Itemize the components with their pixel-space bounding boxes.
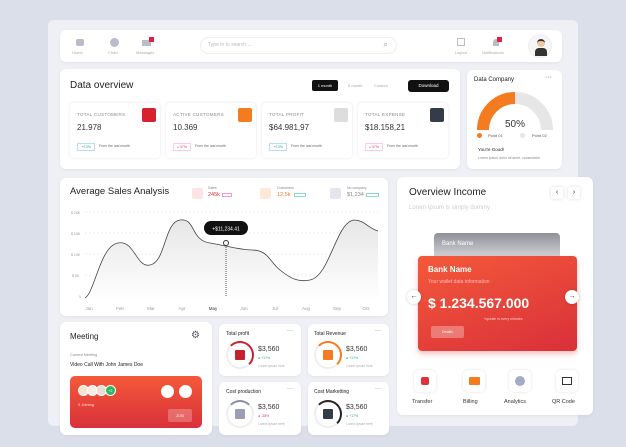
action: transfer xyxy=(412,369,437,405)
panel: overview income: → xyxy=(568,293,576,300)
panel: data overview xyxy=(60,69,460,169)
card: cost marketing: Cost Marketting xyxy=(314,389,349,395)
card: cost marketing: ● +17% xyxy=(346,414,358,418)
action: transfer: Transfer xyxy=(412,399,432,405)
line chart: Jun xyxy=(240,306,248,311)
card: total revenue: ● +17% xyxy=(346,356,358,360)
stat: active customers xyxy=(166,103,256,158)
stat: total profit: ↗13% xyxy=(273,145,283,149)
nav: messages: Messages xyxy=(136,50,154,55)
line chart xyxy=(71,211,378,311)
kpi: sales: Sales xyxy=(208,186,217,190)
top navigation bar xyxy=(60,30,562,62)
card: cost marketing: Lorem Ipsum here xyxy=(346,422,373,426)
heading: Data overview xyxy=(70,80,133,91)
call card: Join xyxy=(176,413,184,418)
nav arrows xyxy=(551,187,563,199)
period tabs xyxy=(312,80,388,91)
action: analytics: Analytics xyxy=(504,399,526,405)
call card: +2 xyxy=(108,389,112,393)
kpi: no company xyxy=(330,186,379,199)
front bank card xyxy=(418,256,577,351)
panel: overview income: Overview Income xyxy=(409,187,486,198)
panel: meeting xyxy=(60,322,212,435)
main frame xyxy=(48,20,578,426)
back card: Bank Name xyxy=(442,241,473,247)
line chart: Mar xyxy=(147,306,155,311)
stat: total customers: 21.978 xyxy=(77,123,101,132)
gauge chart xyxy=(477,92,553,130)
card: total revenue: ··· xyxy=(375,328,381,334)
search box: Type in to search ... xyxy=(208,42,252,48)
line chart: 0 xyxy=(79,295,81,299)
call card xyxy=(70,376,202,428)
panel: data company xyxy=(467,70,562,169)
line chart: Aug xyxy=(302,306,310,311)
nav: messages xyxy=(136,37,154,55)
stat: total profit xyxy=(262,103,352,158)
card: cost production: ··· xyxy=(287,386,293,392)
stat: total customers: ↗13% xyxy=(81,145,91,149)
stat: total expense: $18.158,21 xyxy=(365,123,405,132)
nav: chart: Chart xyxy=(108,50,118,55)
line chart: Oct xyxy=(362,306,370,311)
action: qr code: QR Code xyxy=(552,399,575,405)
kpi: customers: Customers xyxy=(277,186,294,190)
front bank card: *update in every minutes xyxy=(484,317,523,321)
stat: total expense: From the last month xyxy=(387,144,418,148)
stat: active customers: ACTIVE CUSTOMERS xyxy=(173,112,224,117)
panel: meeting: Current Meeting xyxy=(70,353,97,357)
stat: total expense: ↙37% xyxy=(369,145,379,149)
card: cost production: Lorem Ipsum here xyxy=(258,422,285,426)
nav: chart xyxy=(108,38,119,55)
legend: Point 02 xyxy=(532,133,547,138)
stat: total expense xyxy=(358,103,448,158)
card: total revenue: $3,560 xyxy=(346,346,367,353)
stat: active customers: From the last month xyxy=(195,144,226,148)
gauge chart: 50% xyxy=(505,119,525,130)
nav: notifications xyxy=(482,37,504,55)
line chart: $ 5K xyxy=(72,274,80,278)
panel: data company: Data Company xyxy=(474,77,514,83)
card: total profit: ··· xyxy=(287,328,293,334)
back card xyxy=(434,233,560,259)
nav: layout xyxy=(455,38,467,55)
line chart: $ 20K xyxy=(71,211,81,215)
stat: total profit: $64.981,97 xyxy=(269,123,309,132)
card: total revenue: Lorem Ipsum here xyxy=(346,364,373,368)
panel: data company: ··· xyxy=(545,74,552,81)
download button xyxy=(408,80,449,92)
line chart: Jul xyxy=(272,306,278,311)
panel: data company: You're Good! xyxy=(478,147,504,152)
kpi: customers xyxy=(260,186,306,199)
card: cost production: Cost production xyxy=(226,389,261,395)
front bank card: $ 1.234.567.000 xyxy=(428,295,529,311)
line chart: Apr xyxy=(178,306,186,311)
line chart: $ 15K xyxy=(71,232,81,236)
period tabs: 1 month xyxy=(318,83,332,88)
period tabs: 6 month xyxy=(348,83,362,88)
search box: ⌕ xyxy=(384,40,388,49)
nav: layout: Layout xyxy=(455,50,467,55)
front bank card: Details xyxy=(442,330,453,334)
stat: total customers xyxy=(70,103,160,158)
download button: Download xyxy=(418,83,438,88)
search box xyxy=(200,37,397,54)
stat: active customers: 10.369 xyxy=(173,123,197,132)
nav: home: Home xyxy=(72,50,83,55)
card: total revenue xyxy=(308,324,389,376)
kpi: no company: No company xyxy=(347,186,367,190)
line chart: $ 10K xyxy=(71,253,81,257)
card: total revenue: Total Revenue xyxy=(314,331,346,337)
nav: notifications: Notifications xyxy=(482,50,504,55)
card: cost marketing xyxy=(308,382,389,435)
stat: total expense: TOTAL EXPENSE xyxy=(365,112,405,117)
panel: average sales analysis: Average Sales Analysis xyxy=(70,186,169,197)
icon: settings gear: ⚙ xyxy=(191,330,200,341)
legend xyxy=(477,133,547,138)
action: analytics xyxy=(504,369,532,405)
card: cost production xyxy=(219,382,301,435)
action: qr code xyxy=(552,369,579,405)
legend: Point 01 xyxy=(488,133,503,138)
action: billing xyxy=(462,369,486,405)
panel: overview income: › xyxy=(573,189,575,196)
panel: overview income: Lorem Ipsum is simply dummy xyxy=(409,205,490,211)
kpi: no company: $1,234 xyxy=(347,192,364,198)
line chart: Jan xyxy=(85,306,93,311)
line chart: Feb xyxy=(116,306,124,311)
stat: total profit: TOTAL PROFIT xyxy=(269,112,304,117)
panel: data company: Lorem ipsum dolor sit amet, consectetur xyxy=(478,156,540,160)
arrows on card: ← xyxy=(410,293,418,300)
card: cost production: ● -28% xyxy=(258,414,269,418)
kpi: sales: 245k xyxy=(208,192,220,198)
nav: home xyxy=(72,39,84,55)
panel: overview income xyxy=(397,177,593,415)
front bank card: Bank Name xyxy=(428,265,472,274)
stat: total customers: TOTAL CUSTOMERS xyxy=(77,112,125,117)
action: billing: Billing xyxy=(463,399,478,405)
stat: total customers: From the last month xyxy=(99,144,130,148)
line chart: May xyxy=(209,306,218,311)
card: total profit: $3,560 xyxy=(258,346,279,353)
kpi: sales xyxy=(192,186,232,199)
panel: average sales analysis xyxy=(60,178,388,316)
stat: total profit: From the last month xyxy=(291,144,322,148)
avatar xyxy=(528,34,552,58)
card: total profit xyxy=(219,324,301,376)
line chart: +$11,234.41 xyxy=(212,226,240,232)
panel: meeting: Meeting xyxy=(70,332,98,341)
nav arrows: ‹ xyxy=(556,189,558,196)
card: total profit: Total profit xyxy=(226,331,249,337)
call card: 5 Joining xyxy=(78,402,94,407)
stat: active customers: ↙37% xyxy=(177,145,187,149)
card: cost marketing: $3,560 xyxy=(346,404,367,411)
panel: meeting: Video Call With John James Doe xyxy=(70,362,143,368)
card: total profit: Lorem Ipsum here xyxy=(258,364,285,368)
card: cost marketing: ··· xyxy=(375,386,381,392)
front bank card: Your wallet data information xyxy=(428,279,490,285)
arrows on card xyxy=(407,290,421,304)
card: cost production: $3,560 xyxy=(258,404,279,411)
kpi: customers: 12.5k xyxy=(277,192,290,198)
line chart: Sep xyxy=(333,306,341,311)
period tabs: Custom xyxy=(374,83,388,88)
card: total profit: ● +17% xyxy=(258,356,270,360)
